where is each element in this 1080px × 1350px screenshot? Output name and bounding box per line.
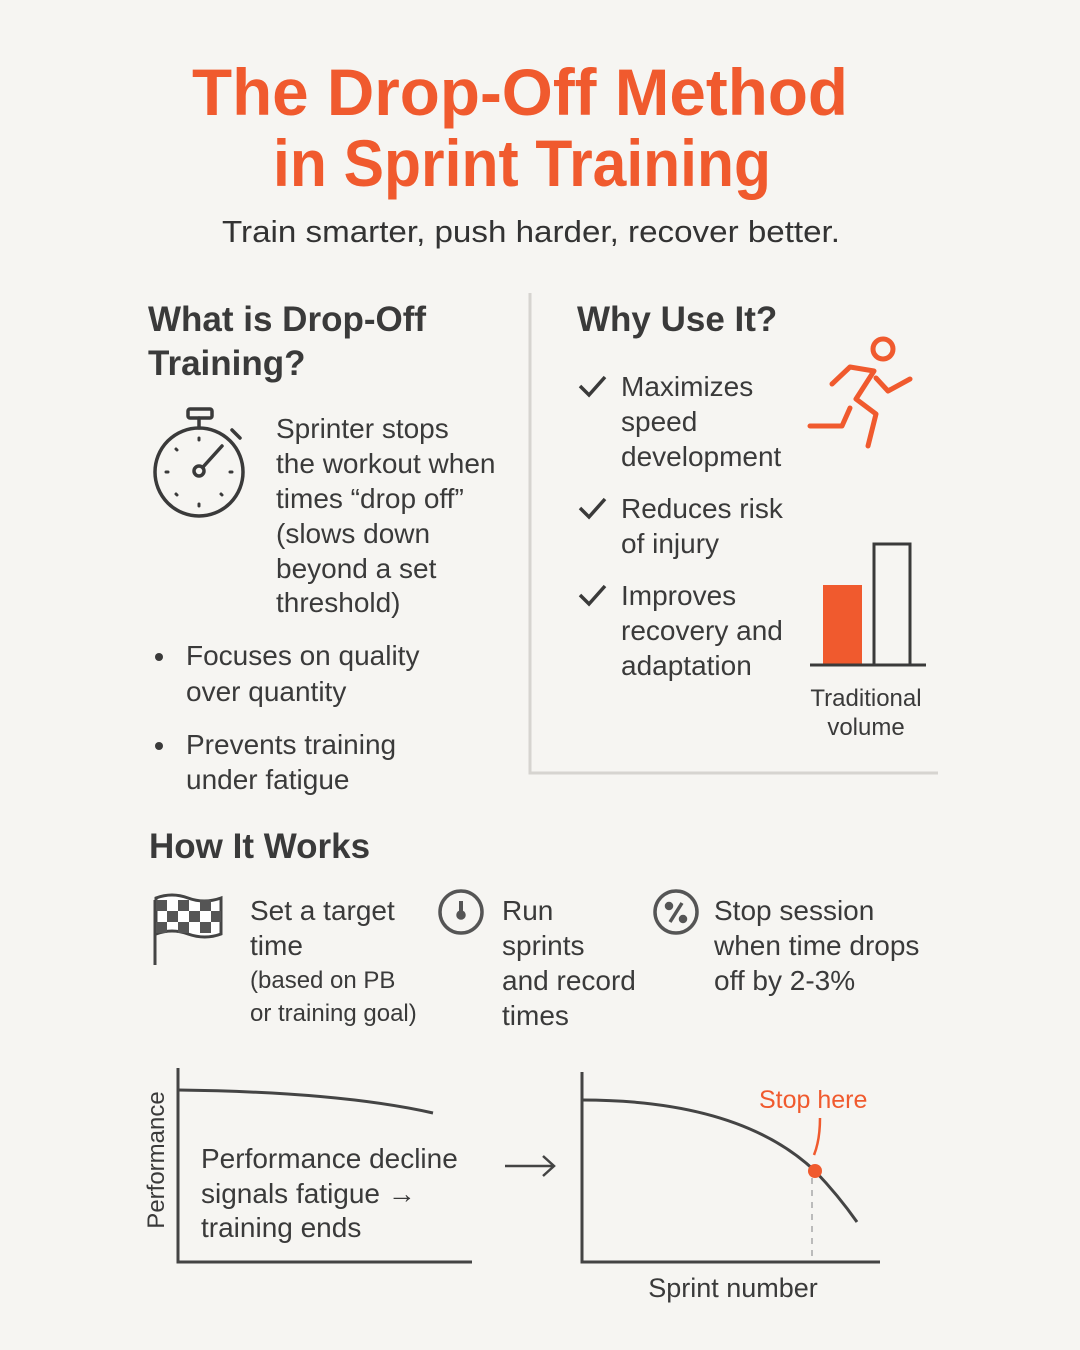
chart: volume bars: Traditional — [810, 685, 922, 712]
checklist: adaptation — [621, 650, 752, 681]
icon: timer — [440, 891, 482, 933]
heading: how: How It Works — [149, 827, 370, 866]
step 1: Set a target — [250, 895, 395, 926]
subtitle: Train smarter, push harder, recover better. — [222, 214, 840, 249]
step 3 — [713, 895, 919, 996]
checklist: speed — [621, 406, 697, 437]
arrow — [505, 1156, 554, 1176]
chart: performance decline: signals fatigue → — [201, 1178, 416, 1209]
panel: how it works — [149, 827, 919, 1031]
title — [192, 55, 848, 200]
heading: what is: What is Drop-Off — [148, 300, 426, 339]
checklist: recovery and — [621, 615, 783, 646]
icon: stopwatch — [155, 409, 243, 516]
step 2: and record — [502, 965, 636, 996]
bullets — [155, 640, 419, 795]
chart: stop point: Sprint number — [648, 1273, 818, 1303]
chart: volume bars — [810, 544, 926, 741]
step 3: when time drops — [713, 930, 919, 961]
step 3: off by 2-3% — [714, 965, 855, 996]
chart: stop point — [582, 1072, 880, 1303]
icon: percent — [655, 891, 697, 933]
heading: why: Why Use It? — [577, 300, 777, 339]
text: definition: beyond a set — [276, 553, 437, 584]
bullets: under fatigue — [186, 764, 349, 795]
step 2: times — [502, 1000, 569, 1031]
step 2 — [502, 895, 636, 1031]
chart: performance decline: Performance decline — [201, 1143, 458, 1174]
checklist: development — [621, 441, 782, 472]
text: definition: times “drop off” — [276, 483, 464, 514]
text: definition: (slows down — [276, 518, 430, 549]
panel: what is drop-off — [148, 300, 495, 795]
checklist: of injury — [621, 528, 719, 559]
step 1: or training goal) — [250, 1000, 417, 1027]
title: in Sprint Training — [273, 126, 771, 200]
step 1 — [250, 895, 417, 1027]
chart: performance decline — [143, 1068, 472, 1262]
text: definition — [276, 413, 495, 618]
step 2: sprints — [502, 930, 584, 961]
step 2: Run — [502, 895, 553, 926]
checklist: Reduces risk — [621, 493, 784, 524]
step 1: time — [250, 930, 303, 961]
title: The Drop-Off Method — [192, 55, 848, 129]
heading: what is: Training? — [148, 344, 306, 383]
dividers — [530, 293, 938, 773]
heading: what is — [148, 300, 426, 383]
chart: performance decline: Performance — [143, 1091, 170, 1229]
chart: volume bars: volume — [827, 714, 905, 741]
text: definition: the workout when — [276, 448, 495, 479]
icon: flag — [155, 895, 221, 965]
panel: why use it — [577, 300, 926, 741]
bullets: over quantity — [186, 676, 346, 707]
text: definition: threshold) — [276, 587, 401, 618]
checklist — [580, 371, 784, 681]
checklist: Improves — [621, 580, 736, 611]
checklist: Maximizes — [621, 371, 753, 402]
text: definition: Sprinter stops — [276, 413, 449, 444]
step 3: Stop session — [714, 895, 874, 926]
icon: runner — [810, 339, 910, 446]
bullets: Prevents training — [186, 729, 396, 760]
chart: performance decline: training ends — [201, 1212, 361, 1243]
chart: stop point: Stop here — [759, 1086, 867, 1114]
bullets: Focuses on quality — [186, 640, 419, 671]
step 1: (based on PB — [250, 967, 395, 994]
